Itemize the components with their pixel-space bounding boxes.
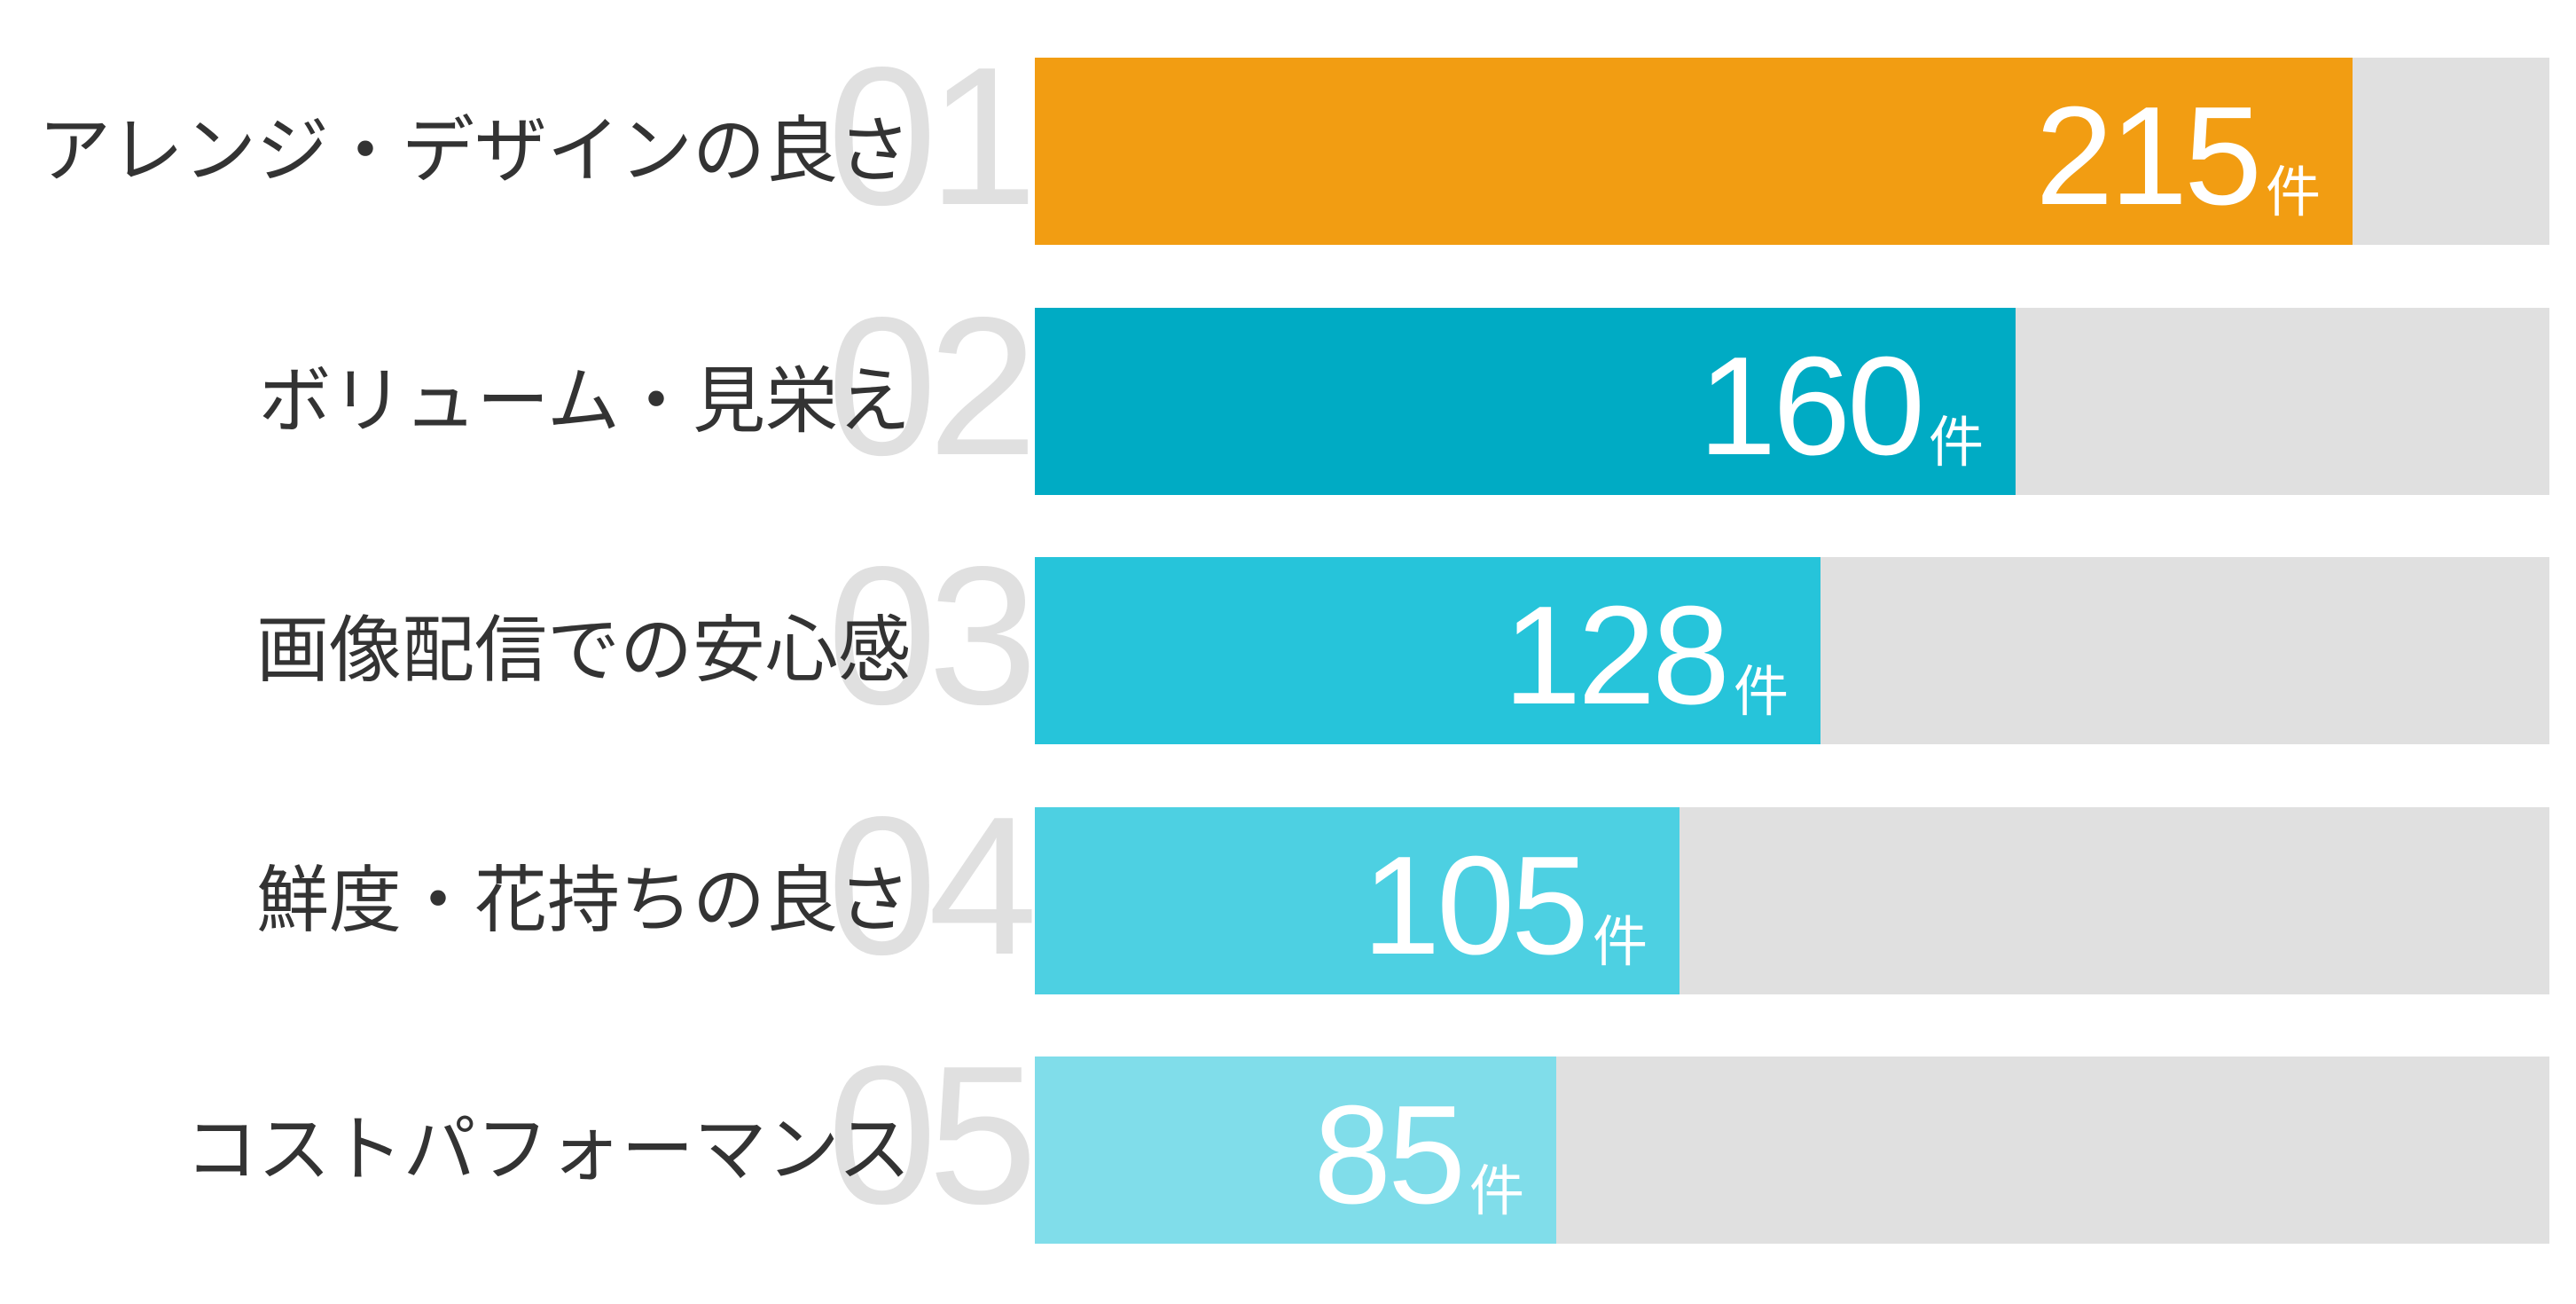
rank number 02: 02 — [827, 277, 1029, 497]
bar: 160 — [1035, 308, 2016, 495]
label: freshness: 鮮度・花持ちの良さ — [256, 860, 911, 941]
bar: 128: 128 — [1503, 577, 1726, 734]
label: arrangement/design: アレンジ・デザインの良さ — [38, 111, 911, 192]
bar: 85: 件 — [1469, 1161, 1524, 1222]
bar: 85 — [1035, 1057, 1556, 1244]
bar: 128: 件 — [1734, 662, 1789, 723]
bar: 215: 件 — [2266, 162, 2321, 224]
bar: 85: 85 — [1313, 1077, 1462, 1233]
track background — [1035, 807, 2549, 994]
row 1 — [38, 27, 2549, 247]
bar: 105 — [1035, 807, 1679, 994]
row 3 — [256, 526, 2549, 746]
track background — [1035, 557, 2549, 744]
bar: 160: 件 — [1929, 412, 1984, 474]
rank number 03: 03 — [827, 526, 1029, 746]
rank number 05: 05 — [827, 1025, 1029, 1245]
bar: 215: 215 — [2035, 78, 2259, 234]
row 5 — [185, 1025, 2549, 1245]
label: cost performance: コストパフォーマンス — [185, 1110, 911, 1190]
label: volume: ボリューム・見栄え — [258, 361, 911, 442]
row 2 — [258, 277, 2549, 497]
bar: 128 — [1035, 557, 1820, 744]
bar: 160: 160 — [1698, 328, 1922, 484]
track background — [1035, 308, 2549, 495]
row 4 — [256, 776, 2549, 996]
bar: 105: 件 — [1593, 912, 1648, 973]
bar: 215 — [1035, 58, 2353, 245]
track background — [1035, 1057, 2549, 1244]
label: image delivery: 画像配信での安心感 — [256, 610, 911, 691]
rank number 04: 04 — [827, 776, 1029, 996]
bar: 105: 105 — [1362, 828, 1586, 984]
rank number 01: 01 — [827, 27, 1029, 247]
track background — [1035, 58, 2549, 245]
